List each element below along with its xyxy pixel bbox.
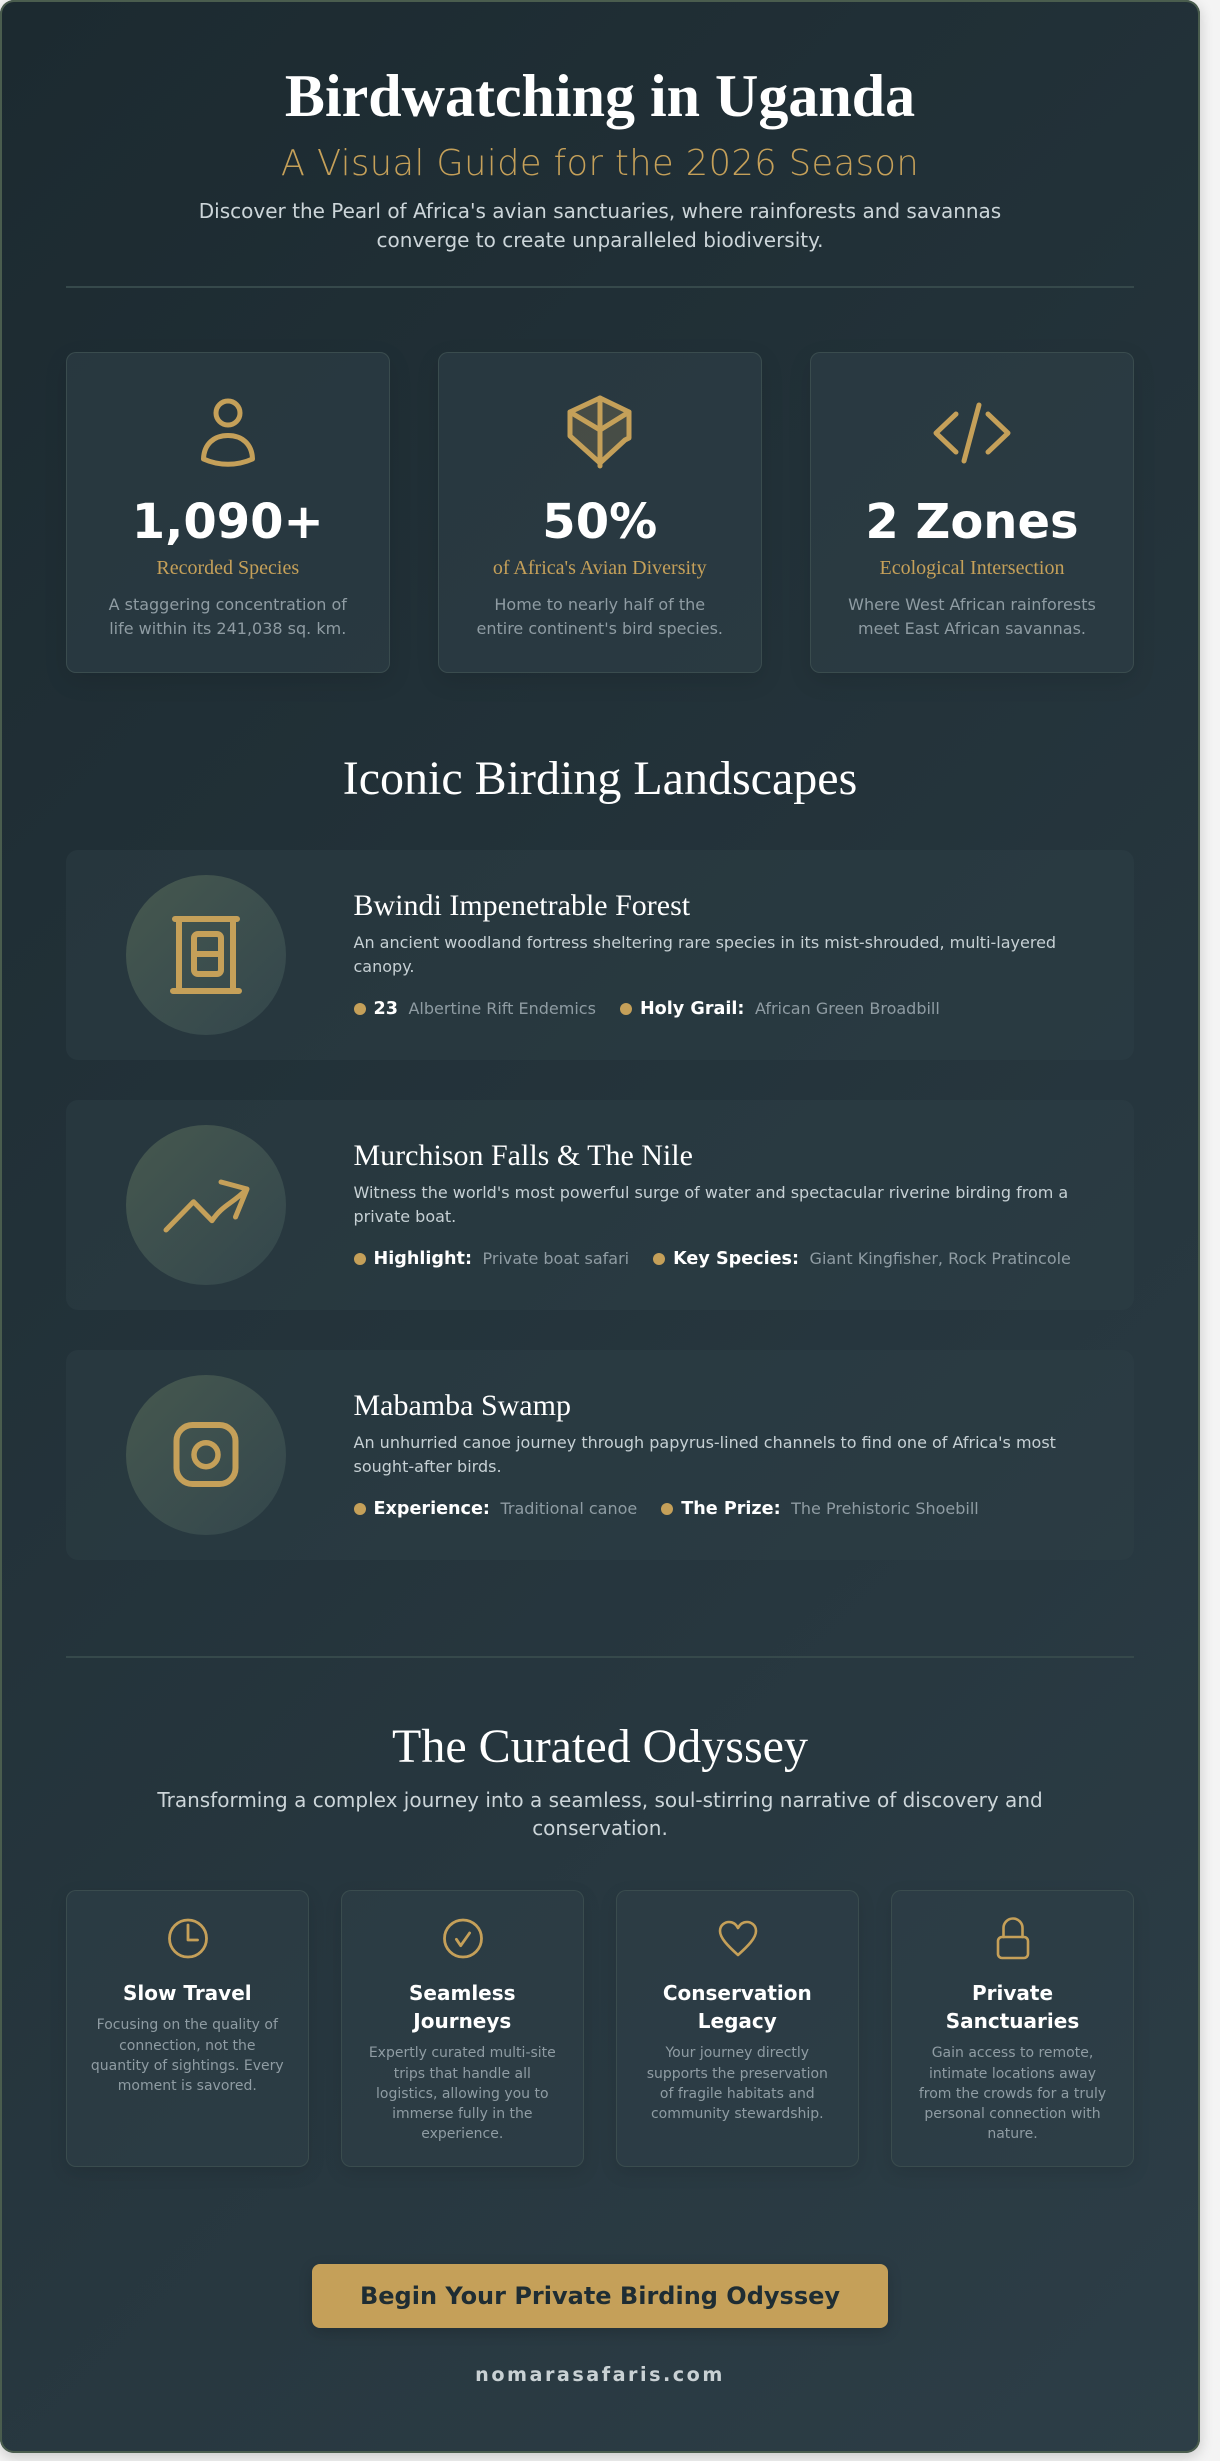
- card title: Private: [972, 1981, 1053, 2005]
- landscape facts: Highlight: Private boat safari: [374, 1248, 629, 1268]
- card: seamless journeys: [341, 1890, 584, 2167]
- card: private sanctuaries: [891, 1890, 1134, 2167]
- card text: personal connection with: [924, 2106, 1101, 2122]
- icon: cube: [568, 396, 632, 468]
- stat description: [476, 594, 723, 638]
- stat description: [848, 594, 1096, 638]
- landscape description: An ancient woodland fortress sheltering rare species in its mist-shrouded, multi-layered: [354, 933, 1056, 952]
- icon: rounded square lens in circle: [126, 1375, 286, 1535]
- panel: Murchison: [66, 1100, 1134, 1310]
- section heading: landscapes: Iconic Birding Landscapes: [343, 752, 857, 805]
- landscape description: Witness the world's most powerful surge of water and spectacular riverine birding from a: [354, 1183, 1068, 1202]
- landscape description: [354, 933, 1056, 976]
- landscape name: Bwindi Impenetrable Forest: [354, 889, 690, 922]
- panel: Mabamba: [66, 1350, 1134, 1560]
- card title: Journeys: [413, 2009, 511, 2033]
- card title: Legacy: [698, 2009, 777, 2033]
- footer website: nomarasafaris.com: [475, 2363, 725, 2386]
- section intro: Transforming a complex journey into a seamless, soul-stirring narrative of discovery and: [157, 1788, 1043, 1812]
- card title: Seamless: [409, 1981, 516, 2005]
- icon: clock: [168, 1918, 208, 1958]
- stat value: 50%: [542, 494, 657, 550]
- card text: Gain access to remote,: [932, 2045, 1093, 2061]
- card text: nature.: [987, 2126, 1038, 2142]
- landscape description: [354, 1433, 1056, 1476]
- landscape name: Mabamba Swamp: [354, 1389, 571, 1422]
- card title: Sanctuaries: [946, 2009, 1079, 2033]
- stat description: Where West African rainforests: [848, 594, 1096, 614]
- landscape facts: The Prize: The Prehistoric Shoebill: [681, 1498, 979, 1518]
- stat description: A staggering concentration of: [109, 594, 347, 614]
- icon: person: [201, 398, 255, 467]
- panel: Bwindi: [66, 850, 1134, 1060]
- landscape facts: Experience: Traditional canoe: [374, 1498, 637, 1518]
- landscape description: canopy.: [354, 957, 414, 976]
- card text: Focusing on the quality of: [97, 2017, 278, 2033]
- section heading: odyssey: The Curated Odyssey: [392, 1720, 808, 1773]
- title: Birdwatching in Uganda: [285, 63, 915, 129]
- card text: intimate locations away: [929, 2066, 1096, 2082]
- card: conservation legacy: [616, 1890, 859, 2167]
- card text: [919, 2045, 1106, 2142]
- card text: [647, 2045, 828, 2122]
- stat description: Home to nearly half of the: [494, 594, 705, 614]
- card text: from the crowds for a truly: [919, 2086, 1106, 2102]
- card title: [409, 1981, 516, 2033]
- call to action button: [312, 2264, 888, 2328]
- card text: Your journey directly: [665, 2045, 809, 2061]
- card text: community stewardship.: [651, 2106, 824, 2122]
- stat description: entire continent's bird species.: [476, 618, 723, 638]
- landscape name: Murchison Falls & The Nile: [354, 1139, 693, 1172]
- stat value: 1,090+: [132, 494, 324, 550]
- card text: [369, 2045, 556, 2142]
- icon: trend arrow in circle: [126, 1125, 286, 1285]
- landscape description: private boat.: [354, 1207, 456, 1226]
- stat label: of Africa's Avian Diversity: [493, 557, 707, 579]
- intro text: [199, 199, 1001, 252]
- card text: supports the preservation: [647, 2066, 828, 2082]
- landscape description: An unhurried canoe journey through papyrus-lined channels to find one of Africa's most: [354, 1433, 1056, 1452]
- icon: code brackets: [934, 402, 1010, 464]
- card title: Conservation: [663, 1981, 812, 2005]
- card text: experience.: [421, 2126, 503, 2142]
- stat card: zones: [810, 352, 1134, 673]
- stat value: 2 Zones: [865, 494, 1079, 550]
- stat label: Ecological Intersection: [880, 557, 1064, 579]
- intro text: converge to create unparalleled biodiversity.: [377, 228, 823, 252]
- subtitle: A Visual Guide for the 2026 Season: [281, 142, 919, 184]
- section intro: conservation.: [532, 1816, 668, 1840]
- card title: Slow Travel: [123, 1981, 252, 2005]
- card text: Expertly curated multi-site: [369, 2045, 556, 2061]
- card text: connection, not the: [119, 2038, 255, 2054]
- icon: check circle: [443, 1918, 483, 1958]
- card text: moment is savored.: [118, 2078, 257, 2094]
- landscape facts: [354, 998, 940, 1018]
- landscape facts: [354, 1248, 1071, 1268]
- card text: quantity of sightings. Every: [91, 2058, 284, 2074]
- stat label: Recorded Species: [156, 557, 299, 579]
- card text: trips that handle all: [394, 2066, 531, 2082]
- card text: immerse fully in the: [392, 2106, 532, 2122]
- stat card: diversity: [438, 352, 762, 673]
- landscape description: [354, 1183, 1068, 1226]
- card: slow travel: [66, 1890, 309, 2167]
- card title: [663, 1981, 812, 2033]
- card title: [946, 1981, 1079, 2033]
- landscape facts: Key Species: Giant Kingfisher, Rock Pratincole: [673, 1248, 1071, 1268]
- landscape facts: Holy Grail: African Green Broadbill: [640, 998, 940, 1018]
- section intro: [157, 1788, 1043, 1840]
- landscape description: sought-after birds.: [354, 1457, 502, 1476]
- call to action button: Begin Your Private Birding Odyssey: [360, 2282, 840, 2310]
- stat description: [108, 594, 348, 638]
- icon: padlock: [996, 1917, 1030, 1960]
- icon: heart: [718, 1920, 758, 1956]
- stat description: meet East African savannas.: [858, 618, 1086, 638]
- stat card: species: [66, 352, 390, 673]
- landscape facts: [354, 1498, 979, 1518]
- stat description: life within its 241,038 sq. km.: [109, 618, 346, 638]
- intro text: Discover the Pearl of Africa's avian sanctuaries, where rainforests and savannas: [199, 199, 1001, 223]
- landscape facts: 23 Albertine Rift Endemics: [374, 998, 596, 1018]
- card text: [91, 2017, 284, 2094]
- card text: logistics, allowing you to: [376, 2086, 549, 2102]
- icon: pillars in circle: [126, 875, 286, 1035]
- card text: of fragile habitats and: [660, 2086, 815, 2102]
